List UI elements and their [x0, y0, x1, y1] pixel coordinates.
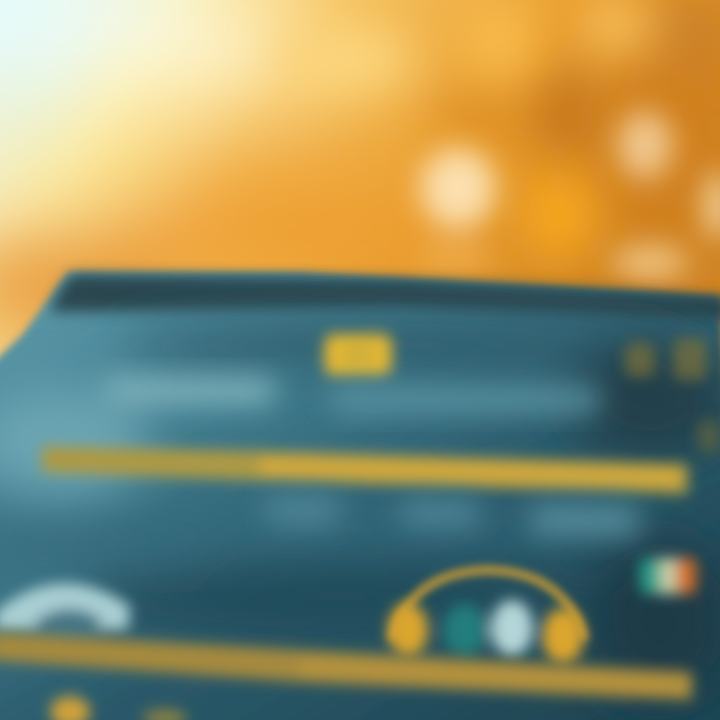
- icon: gold gauge emblem: [388, 570, 584, 664]
- chip: gold logo: [324, 334, 392, 376]
- card shading: [0, 323, 720, 700]
- icon: colored tag right: [640, 558, 696, 594]
- credit card body: [0, 272, 720, 720]
- card top dark edge: [50, 274, 720, 320]
- icon: faint gold marks top right: [625, 338, 720, 452]
- bokeh lights: [275, 0, 718, 257]
- icon: pale arc bottom left: [0, 583, 130, 640]
- gold strip: upper line: [42, 446, 688, 494]
- gold strip: lower line: [0, 632, 692, 700]
- icon: gold marks bottom left: [50, 696, 187, 720]
- text band: pale numbers under strip: [265, 496, 640, 536]
- text band: pale card title: [105, 378, 600, 412]
